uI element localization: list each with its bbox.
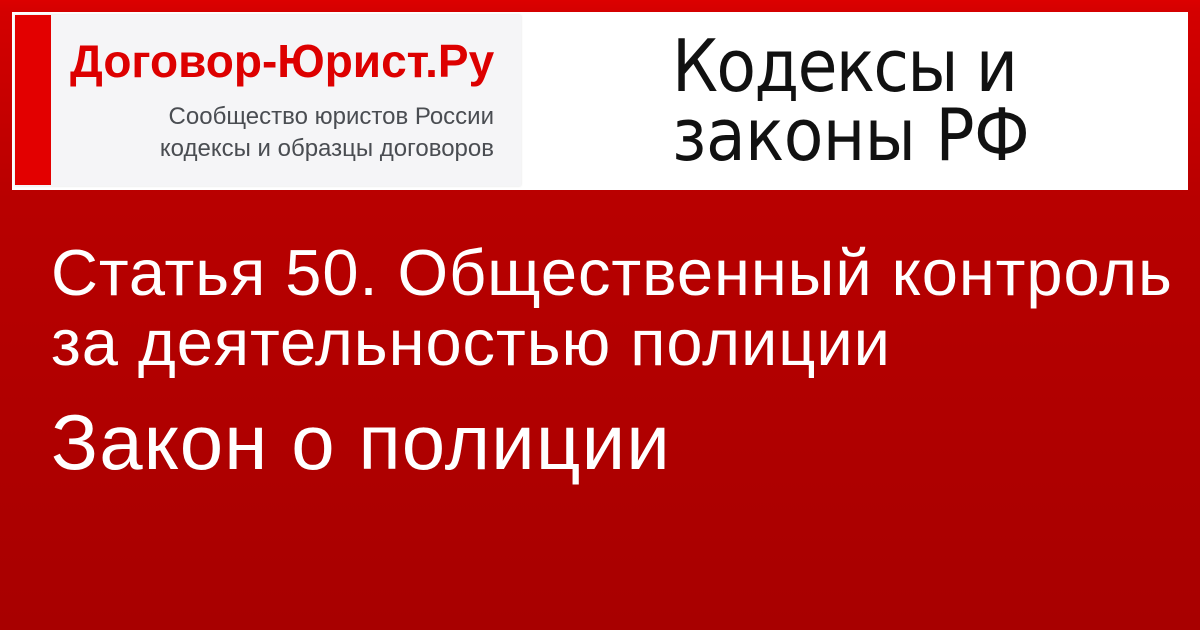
logo panel [15,15,521,186]
site heading [672,24,1029,177]
article title [51,236,1173,379]
logo tagline: Сообщество юристов России [169,103,494,130]
article title: Статья 50. Общественный контроль [51,236,1173,309]
logo tagline [160,103,494,162]
header panel [12,12,1188,190]
site heading: Кодексы и [672,24,1016,108]
logo tagline: кодексы и образцы договоров [160,135,494,162]
law name: Закон о полиции [51,398,671,486]
article title: за деятельностью полиции [51,306,891,379]
logo red bar [15,15,51,185]
logo title: Договор-Юрист.Ру [70,35,494,87]
site heading: законы РФ [672,93,1029,177]
